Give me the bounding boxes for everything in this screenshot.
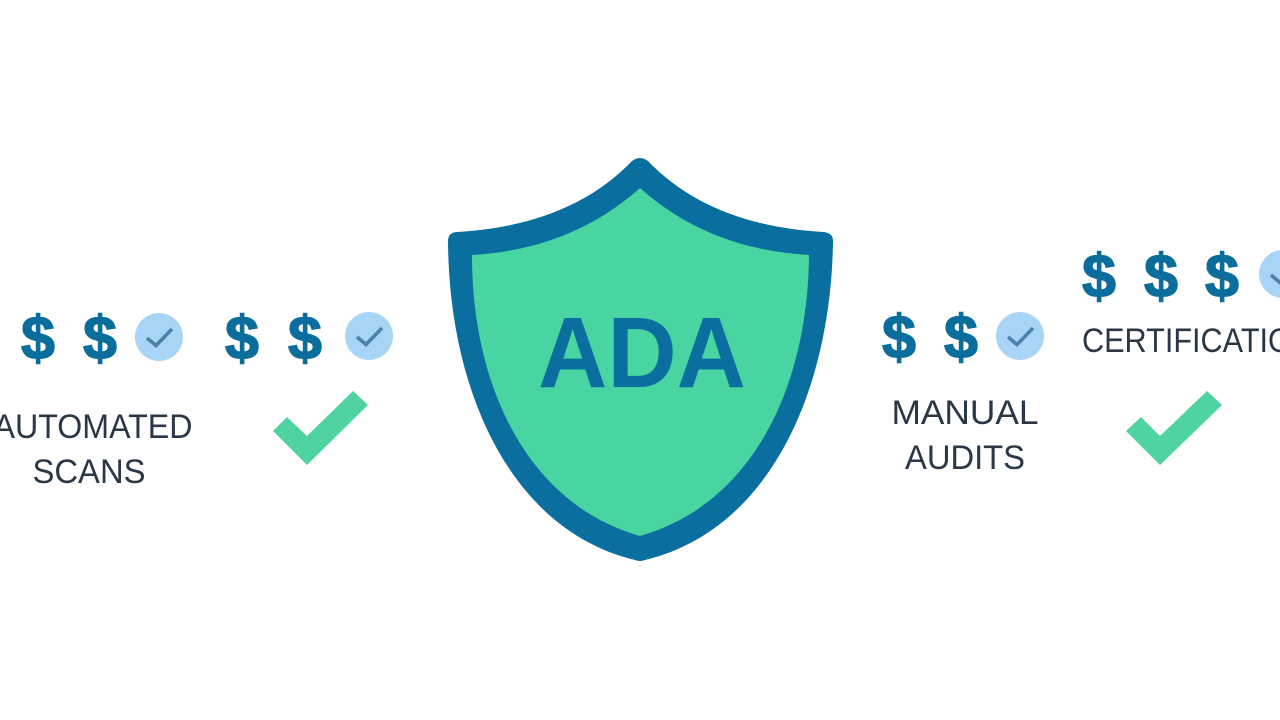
icon: blue check badge	[135, 313, 183, 361]
dollar signs: $	[1082, 242, 1116, 310]
dollar signs: $	[882, 303, 916, 371]
group: certification cost: $	[1205, 242, 1239, 310]
dollar signs: $	[21, 304, 55, 372]
group: manual audits cost: $	[944, 303, 978, 371]
icon: green check, left	[273, 391, 368, 465]
icon: blue check badge, cropped	[1259, 250, 1280, 298]
label: manual audits: MANUAL	[892, 394, 1038, 432]
group: automated scans cost	[21, 304, 183, 372]
group: second automated cost: $	[288, 304, 322, 372]
shield outer border	[448, 158, 833, 561]
icon: blue check badge	[345, 312, 393, 360]
group: certification cost	[1082, 242, 1280, 310]
icon: blue check badge	[996, 312, 1044, 360]
ADA label: ADA	[538, 297, 746, 409]
label: automated scans: SCANS	[32, 453, 146, 491]
shield inner fill	[472, 188, 809, 536]
dollar signs: $	[225, 304, 259, 372]
group: certification cost: $	[1144, 242, 1178, 310]
group: manual audits cost	[882, 303, 1044, 371]
label: manual audits: AUDITS	[905, 439, 1025, 477]
group: automated scans cost: $	[83, 304, 117, 372]
icon: green check, right	[1126, 391, 1222, 465]
shield: ADA	[448, 158, 833, 561]
group: second automated cost	[225, 304, 393, 372]
